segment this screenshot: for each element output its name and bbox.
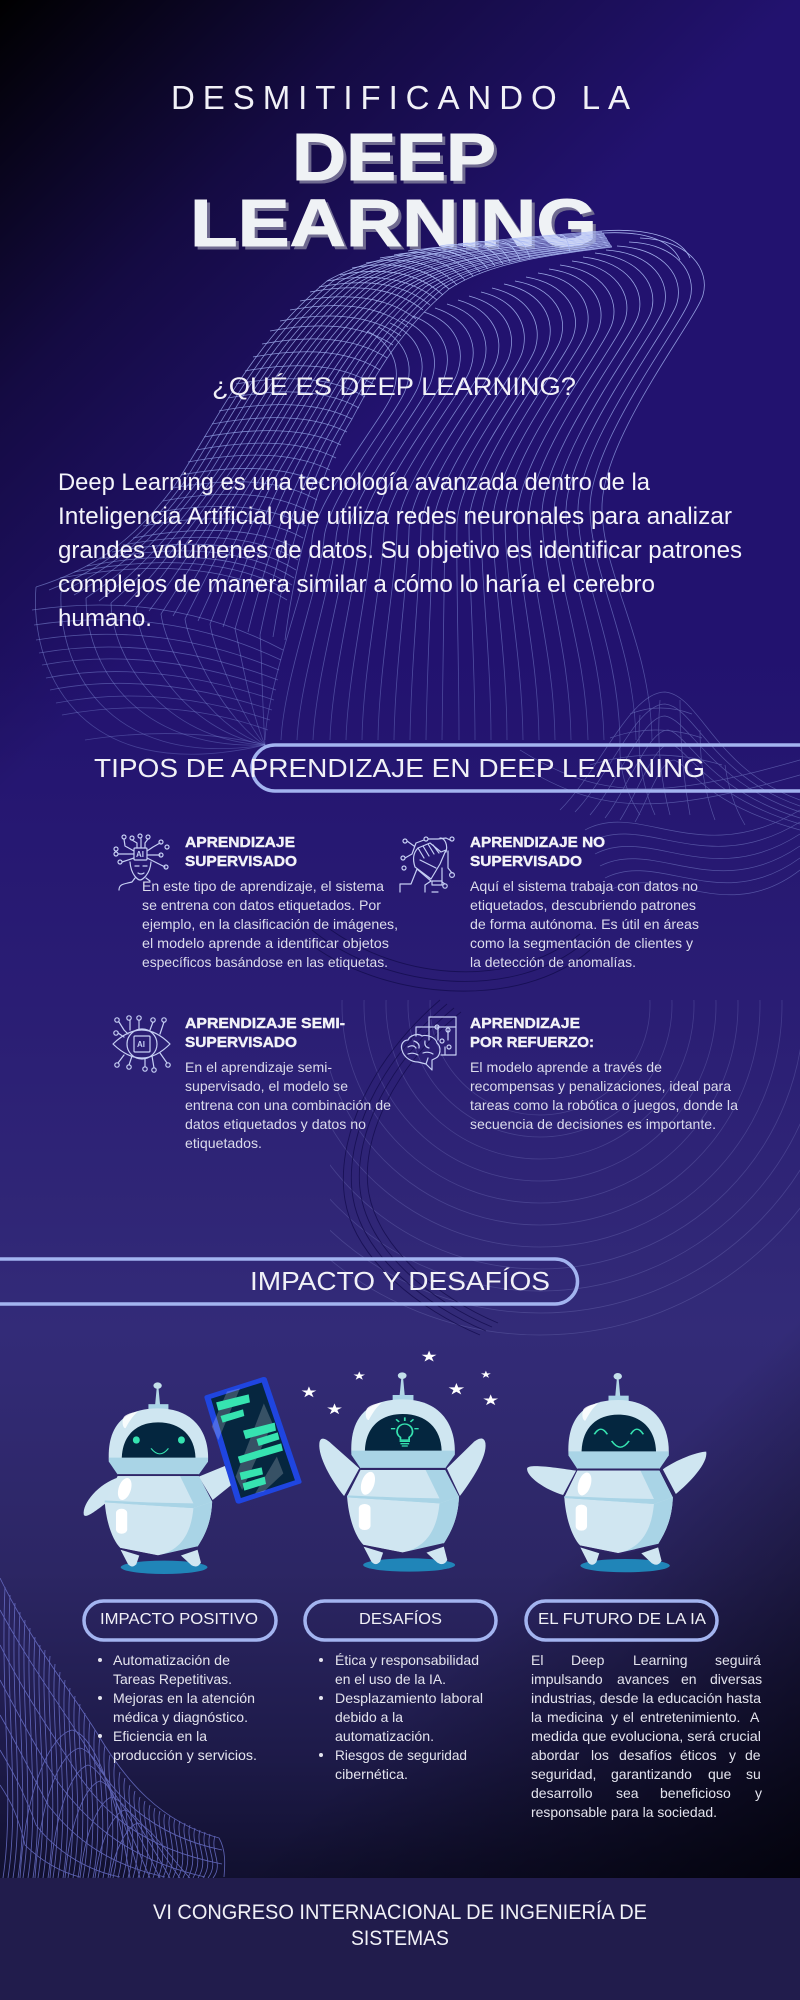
justified paragraph: los [591, 1747, 609, 1763]
intro paragraph: Inteligencia Artificial que utiliza redes neuronales para analizar [58, 503, 732, 530]
card text: Aquí el sistema trabaja con datos no [470, 878, 698, 894]
justified paragraph: entretenimiento. [640, 1709, 740, 1725]
column: el futuro de la ia [526, 1601, 762, 1820]
icon: AI head [114, 834, 169, 890]
justified paragraph: y [755, 1785, 762, 1801]
panel: aprendizaje por refuerzo: secuencia de decisiones es importante. [470, 1116, 716, 1132]
icon: brain and circuit [401, 1017, 456, 1070]
justified paragraph: su [746, 1766, 761, 1782]
panel: aprendizaje no supervisado: etiquetados, descubriendo patrones [470, 897, 696, 913]
robot smiling [527, 1373, 706, 1572]
panel: aprendizaje supervisado [114, 834, 398, 970]
section header: tipos de aprendizaje: TIPOS DE APRENDIZAJE EN DEEP LEARNING [94, 753, 705, 783]
intro paragraph [58, 469, 742, 632]
bullet list [98, 1652, 257, 1763]
column: desafios: DESAFÍOS [359, 1609, 442, 1628]
justified paragraph: Learning [633, 1652, 688, 1668]
footer: SISTEMAS [351, 1927, 449, 1950]
justified paragraph: beneficioso [660, 1785, 731, 1801]
title line 1: DESMITIFICANDO LA [171, 79, 630, 116]
pill label [305, 1601, 496, 1640]
justified paragraph: seguirá [715, 1652, 761, 1668]
section header: impacto y desafios: IMPACTO Y DESAFÍOS [250, 1266, 550, 1296]
panel: aprendizaje no supervisado: como la segmentación de clientes y [470, 935, 693, 951]
title [171, 79, 630, 261]
justified paragraph: que [708, 1766, 732, 1782]
bullet list: médica y diagnóstico. [113, 1709, 248, 1725]
justified paragraph: Deep [571, 1652, 605, 1668]
pill label [84, 1601, 276, 1640]
card text: El modelo aprende a través de [470, 1059, 662, 1075]
justified paragraph: medida que evoluciona, será crucial [531, 1728, 761, 1744]
bullet list [319, 1652, 483, 1782]
heading: que es deep learning: ¿QUÉ ES DEEP LEARNING? [212, 372, 576, 401]
concentric arcs: light [330, 1000, 800, 1336]
panel: aprendizaje por refuerzo [401, 1015, 738, 1132]
bullet list: Riesgos de seguridad [335, 1747, 467, 1763]
justified paragraph: sea [616, 1785, 639, 1801]
intro paragraph: grandes volúmenes de datos. Su objetivo es identificar patrones [58, 537, 742, 564]
robots illustration [84, 1351, 706, 1574]
justified paragraph: medicina [547, 1709, 603, 1725]
panel: aprendizaje supervisado: SUPERVISADO [185, 853, 297, 870]
card text: En este tipo de aprendizaje, el sistema [142, 878, 384, 894]
section header: impacto y desafios [0, 1259, 578, 1304]
column: desafios [305, 1601, 496, 1782]
light bulb [391, 1417, 419, 1446]
bullet list: Tareas Repetitivas. [113, 1671, 232, 1687]
panel: aprendizaje semi-supervisado: datos etiquetados y datos no [185, 1116, 366, 1132]
justified paragraph: de [745, 1747, 761, 1763]
bullet list: Mejoras en la atención [113, 1690, 255, 1706]
concentric arcs: dark [305, 920, 590, 1335]
icon: robotic hand [400, 837, 454, 892]
bullet list: en el uso de la IA. [335, 1671, 446, 1687]
justified paragraph: el [623, 1709, 634, 1725]
justified paragraph: éticos [680, 1747, 717, 1763]
justified paragraph: garantizando [611, 1766, 692, 1782]
justified paragraph: seguridad, [531, 1766, 596, 1782]
panel: aprendizaje no supervisado: de forma autónoma. Es útil en áreas [470, 916, 699, 932]
card heading: APRENDIZAJE NO [470, 834, 605, 851]
panel: aprendizaje supervisado: se entrena con datos etiquetados. Por [142, 897, 381, 913]
wave mesh: bottom left [0, 1578, 225, 1878]
title line 2 and 3: DEEP [292, 120, 496, 195]
justified paragraph: y [611, 1709, 618, 1725]
justified paragraph: desafíos [619, 1747, 672, 1763]
panel: aprendizaje semi-supervisado [113, 1015, 391, 1151]
justified paragraph: diversas [710, 1671, 762, 1687]
panel: aprendizaje semi-supervisado: supervisado, el modelo se [185, 1078, 348, 1094]
panel: aprendizaje por refuerzo: tareas como la robótica o juegos, donde la [470, 1097, 738, 1113]
panel: aprendizaje semi-supervisado: SUPERVISADO [185, 1034, 297, 1051]
title line 2 and 3: LEARNING [190, 186, 597, 261]
justified paragraph: desarrollo [531, 1785, 593, 1801]
stars [302, 1351, 498, 1414]
bullet list: producción y servicios. [113, 1747, 257, 1763]
bullet list: Desplazamiento laboral [335, 1690, 483, 1706]
bullet list: Ética y responsabilidad [335, 1652, 479, 1668]
justified paragraph: abordar [531, 1747, 580, 1763]
justified paragraph [531, 1652, 762, 1820]
justified paragraph: industrias, desde la educación hasta [531, 1690, 761, 1706]
panel: aprendizaje no supervisado [400, 834, 699, 970]
section header: tipos de aprendizaje [94, 745, 800, 791]
justified paragraph: avances [617, 1671, 669, 1687]
card text: En el aprendizaje semi- [185, 1059, 332, 1075]
card heading: APRENDIZAJE SEMI- [185, 1015, 345, 1032]
panel: aprendizaje semi-supervisado: etiquetados. [185, 1135, 262, 1151]
intro paragraph: Deep Learning es una tecnología avanzada dentro de la [58, 469, 651, 496]
justified paragraph: El [531, 1652, 543, 1668]
icon: AI head: AI [136, 850, 144, 859]
robot with light bulb [319, 1372, 486, 1572]
wave mesh: right dome [520, 692, 800, 895]
column: impacto positivo [84, 1601, 276, 1763]
title line 2 and 3 [190, 120, 597, 261]
panel: aprendizaje supervisado: el modelo aprende a identificar objetos [142, 935, 389, 951]
column: impacto positivo: IMPACTO POSITIVO [100, 1611, 258, 1628]
justified paragraph: la [531, 1709, 542, 1725]
smiling face [594, 1429, 643, 1447]
intro paragraph: complejos de manera similar a cómo lo haría el cerebro [58, 571, 655, 598]
footer: VI CONGRESO INTERNACIONAL DE INGENIERÍA DE [153, 1901, 647, 1924]
bullet list: cibernética. [335, 1766, 408, 1782]
bullet list: debido a la [335, 1709, 403, 1725]
card heading: APRENDIZAJE [470, 1015, 580, 1032]
column: el futuro de la ia: EL FUTURO DE LA IA [538, 1611, 706, 1628]
intro paragraph: humano. [58, 605, 152, 632]
panel: aprendizaje por refuerzo: POR REFUERZO: [470, 1034, 594, 1051]
wave mesh: main ribbon [32, 230, 704, 754]
icon: AI eye: AI [137, 1040, 145, 1049]
panel: aprendizaje por refuerzo: recompensas y penalizaciones, ideal para [470, 1078, 731, 1094]
footer [0, 1878, 800, 2000]
justified paragraph: responsable para la sociedad. [531, 1804, 717, 1820]
panel: aprendizaje supervisado: ejemplo, en la clasificación de imágenes, [142, 916, 398, 932]
justified paragraph: A [750, 1709, 760, 1725]
bullet list: Eficiencia en la [113, 1728, 207, 1744]
justified paragraph: y [729, 1747, 736, 1763]
panel: aprendizaje no supervisado: SUPERVISADO [470, 853, 582, 870]
robot face [133, 1436, 140, 1444]
card heading: APRENDIZAJE [185, 834, 295, 851]
tablet [207, 1379, 299, 1501]
justified paragraph: en [681, 1671, 697, 1687]
bullet list: automatización. [335, 1728, 434, 1744]
pill label [526, 1601, 717, 1640]
bullet list: Automatización de [113, 1652, 230, 1668]
robot with tablet [84, 1379, 299, 1574]
icon: AI eye [113, 1016, 170, 1072]
panel: aprendizaje supervisado: específicos basándose en las etiquetas. [142, 954, 388, 970]
panel: aprendizaje no supervisado: la detección de anomalías. [470, 954, 636, 970]
justified paragraph: impulsando [531, 1671, 603, 1687]
panel: aprendizaje semi-supervisado: entrena con una combinación de [185, 1097, 391, 1113]
